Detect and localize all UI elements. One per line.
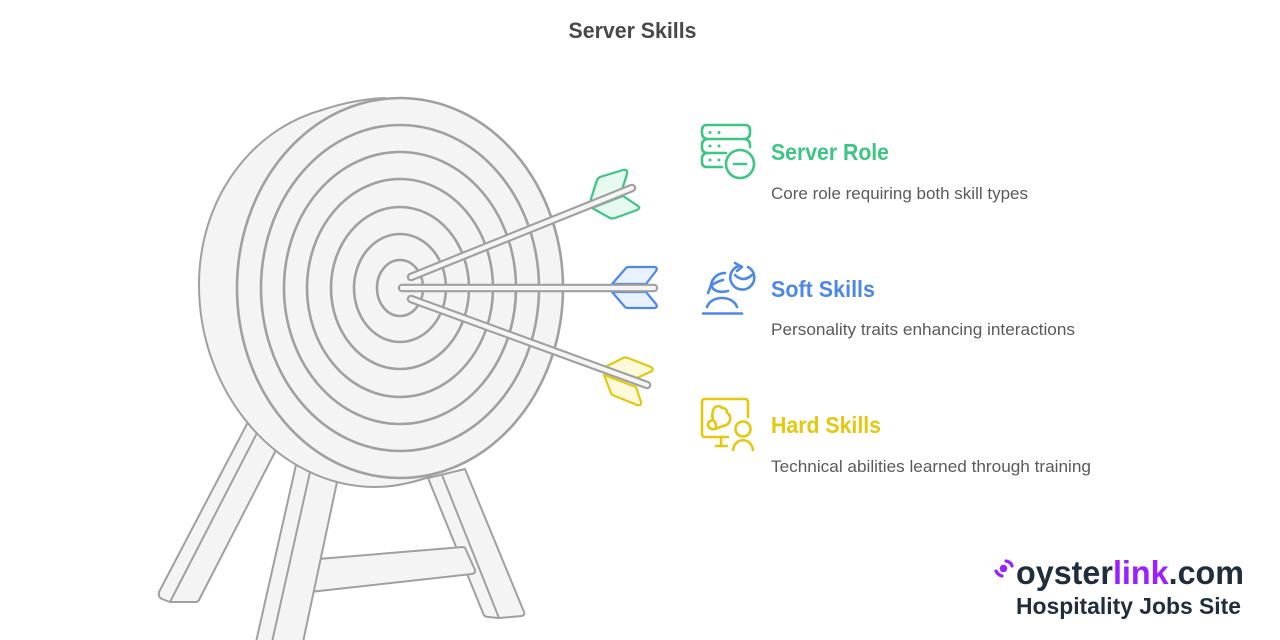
arrow: green — [411, 170, 639, 277]
wordmark: oysterlink.com — [1016, 554, 1244, 591]
left leg — [159, 422, 276, 602]
item: server role — [702, 125, 1028, 203]
heading: soft skills: Soft Skills — [771, 276, 875, 302]
icon: server with minus — [702, 125, 754, 178]
crossbar — [310, 547, 475, 592]
right leg — [428, 469, 524, 618]
icon: person with rotating globe — [703, 263, 754, 314]
description: server role: Core role requiring both skill types — [771, 184, 1028, 203]
item: soft skills — [703, 263, 1075, 339]
middle leg — [256, 465, 337, 640]
target rings — [237, 98, 563, 478]
title: Server Skills — [568, 18, 696, 43]
heading: server role: Server Role — [771, 139, 889, 165]
item: hard skills — [702, 399, 1091, 476]
arrow: yellow — [411, 299, 653, 405]
target back edge — [199, 98, 432, 487]
logo: oysterlink — [996, 554, 1244, 619]
heading: hard skills: Hard Skills — [771, 412, 881, 438]
description: soft skills: Personality traits enhancing interactions — [771, 320, 1075, 339]
tagline: Hospitality Jobs Site — [1016, 593, 1241, 619]
icon: logo mark — [996, 561, 1012, 576]
icon: presenter at screen — [702, 399, 753, 450]
description: hard skills: Technical abilities learned through training — [771, 457, 1091, 476]
target illustration — [159, 98, 563, 640]
arrow: blue — [402, 267, 657, 308]
